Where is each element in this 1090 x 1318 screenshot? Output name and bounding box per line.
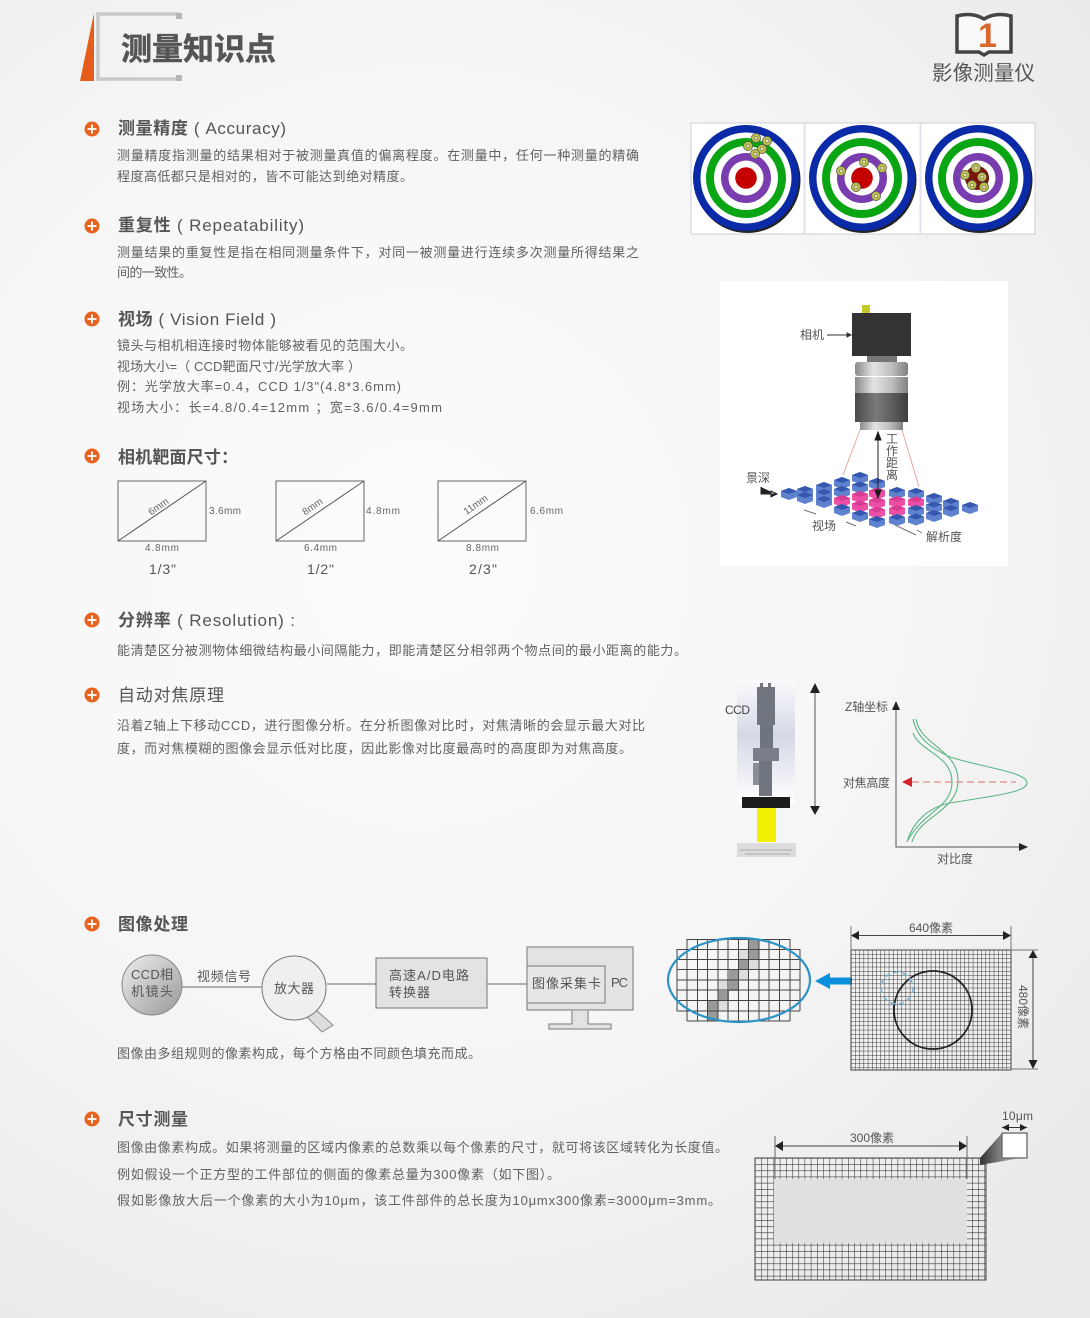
PC monitor bbox=[527, 947, 633, 1029]
target: low precision, high accuracy bbox=[809, 125, 916, 233]
CCD autofocus diagram bbox=[725, 680, 820, 857]
sensor size 2/3: 11mm bbox=[462, 493, 490, 518]
section: 尺寸测量 bbox=[84, 1110, 728, 1208]
labels: 距 bbox=[886, 456, 898, 470]
sensor size 1/3: 1/3" bbox=[149, 561, 176, 577]
field of view lines bbox=[843, 430, 919, 487]
640x480 pixel grid: 640像素 bbox=[909, 921, 953, 935]
section caption: 图像处理: 图像由多组规则的像素构成，每个方格由不同颜色填充而成。 bbox=[117, 1046, 481, 1061]
title: 测量知识点: 测量知识点 bbox=[121, 32, 276, 67]
section: 重复性: 测量结果的重复性是指在相同测量条件下，对同一被测量进行连续多次测量所得结果之 bbox=[117, 245, 639, 260]
working distance arrow bbox=[875, 432, 881, 498]
sensor size 1/2: 8mm bbox=[301, 496, 325, 518]
section: 自动对焦原理: 自动对焦原理 bbox=[118, 686, 224, 705]
CCD autofocus diagram: CCD bbox=[725, 703, 750, 717]
CCD lens: 机镜头 bbox=[131, 984, 173, 999]
section: 重复性: 重复性 ( Repeatability) bbox=[118, 215, 304, 235]
labels: 视场 bbox=[812, 518, 836, 533]
pixel blocks bbox=[781, 472, 978, 528]
section: 测量精度: 测量精度 ( Accuracy) bbox=[118, 119, 286, 138]
vision system diagram bbox=[720, 281, 1008, 566]
section heading: 图像处理 bbox=[84, 915, 188, 934]
640x480 pixel grid: 480像素 bbox=[1016, 985, 1030, 1029]
PC monitor: PC bbox=[611, 975, 628, 990]
accuracy targets image bbox=[691, 123, 1035, 234]
section: 测量精度: 程度高低都只是相对的，皆不可能达到绝对精度。 bbox=[117, 169, 413, 184]
section: 尺寸测量: 图像由像素构成。如果将测量的区域内像素的总数乘以每个像素的尺寸，就可将该区域转化为长度值。 bbox=[117, 1140, 728, 1155]
CCD lens: CCD相 bbox=[131, 967, 173, 982]
logo: book icon with 影像测量仪: 影像测量仪 bbox=[932, 62, 1035, 85]
labels: 相机 bbox=[800, 328, 824, 342]
labels: 作 bbox=[886, 444, 898, 458]
section: 重复性: 间的一致性。 bbox=[117, 265, 192, 280]
sensor size 1/2: 6.4mm bbox=[304, 543, 337, 554]
sensor size 1/2 bbox=[276, 481, 400, 577]
300 pixel workpiece grid: 300像素 bbox=[850, 1131, 894, 1145]
title: 测量知识点 bbox=[80, 13, 276, 81]
contrast vs Z axis chart: 对焦高度 bbox=[843, 775, 890, 790]
sensor size 1/3: 4.8mm bbox=[145, 543, 179, 554]
10μm pixel callout bbox=[980, 1109, 1033, 1165]
logo: book icon with 影像测量仪: 1 bbox=[978, 17, 997, 55]
contrast vs Z axis chart bbox=[843, 699, 1028, 866]
section: 视场: 视场 ( Vision Field ) bbox=[118, 310, 276, 329]
section: 尺寸测量: 假如影像放大后一个像素的大小为10μm，该工件部件的总长度为10μmx300像素=3000μm=3mm。 bbox=[117, 1193, 721, 1208]
section: 测量精度 bbox=[84, 119, 639, 184]
section: 测量精度: 测量精度指测量的结果相对于被测量真值的偏离程度。在测量中，任何一种测量的精确 bbox=[117, 148, 639, 163]
labels: 解析度 bbox=[926, 529, 962, 544]
sensor size 2/3: 2/3" bbox=[469, 561, 497, 577]
image processing flow diagram: 视频信号 bbox=[197, 969, 251, 984]
A/D converter bbox=[376, 958, 487, 1008]
section: 视场: 视场大小：长=4.8/0.4=12mm ；宽=3.6/0.4=9mm bbox=[117, 400, 442, 416]
10μm pixel callout: 10μm bbox=[1002, 1109, 1033, 1123]
section: 自动对焦原理 bbox=[84, 686, 645, 756]
section heading: 相机靶面尺寸: 相机靶面尺寸： bbox=[118, 448, 238, 467]
sensor size 1/3 bbox=[118, 481, 241, 577]
amplifier bbox=[262, 956, 333, 1032]
section: 视场: 例：光学放大率=0.4，CCD 1/3"(4.8*3.6mm) bbox=[117, 379, 401, 394]
sensor size 2/3: 6.6mm bbox=[530, 506, 563, 517]
labels: 离 bbox=[886, 467, 898, 482]
section: 视场: 视场大小=（ CCD靶面尺寸/光学放大率 ） bbox=[117, 359, 361, 374]
labels bbox=[746, 328, 962, 544]
contrast vs Z axis chart: Z轴坐标 bbox=[845, 699, 888, 714]
CCD lens bbox=[122, 955, 182, 1015]
section: 视场: 镜头与相机相连接时物体能够被看见的范围大小。 bbox=[117, 338, 413, 353]
target: high precision, high accuracy bbox=[925, 125, 1032, 233]
sensor size 1/2: 1/2" bbox=[307, 561, 334, 577]
labels: 工 bbox=[886, 432, 898, 446]
section: 自动对焦原理: 沿着Z轴上下移动CCD，进行图像分析。在分析图像对比时，对焦清晰的会显示最大对比 bbox=[117, 718, 645, 733]
target: high precision, low accuracy bbox=[693, 125, 800, 233]
section heading: 图像处理: 图像处理 bbox=[118, 915, 188, 934]
contrast vs Z axis chart: 对比度 bbox=[937, 851, 973, 866]
sensor size 1/3: 6mm bbox=[147, 496, 171, 518]
section: 重复性 bbox=[84, 215, 639, 280]
640x480 pixel grid bbox=[851, 921, 1038, 1070]
image processing flow diagram bbox=[122, 947, 633, 1032]
labels: 景深 bbox=[746, 471, 770, 485]
blue arrow bbox=[815, 973, 852, 989]
section: 尺寸测量: 例如假设一个正方型的工件部位的侧面的像素总量为300像素（如下图）。 bbox=[117, 1167, 560, 1182]
sensor size 2/3: 8.8mm bbox=[466, 543, 499, 554]
pixel zoom ellipse bbox=[668, 938, 810, 1022]
logo: book icon with 影像测量仪 bbox=[932, 15, 1035, 85]
amplifier: 放大器 bbox=[274, 981, 314, 996]
PC monitor: 图像采集卡 bbox=[532, 976, 601, 991]
300 pixel workpiece grid bbox=[755, 1109, 1033, 1280]
sensor size 1/2: 4.8mm bbox=[366, 506, 400, 517]
section: 分辨率: 分辨率 ( Resolution) : bbox=[118, 610, 295, 630]
section: 视场 bbox=[84, 310, 442, 416]
camera and lens bbox=[852, 305, 911, 430]
sensor size 2/3 bbox=[438, 481, 563, 577]
A/D converter: 高速A/D电路 bbox=[389, 968, 469, 983]
section: 分辨率: 能清楚区分被测物体细微结构最小间隔能力，即能清楚区分相邻两个物点间的最小距离的能力。 bbox=[117, 643, 687, 658]
section: 分辨率 bbox=[84, 610, 687, 658]
section: 自动对焦原理: 度，而对焦模糊的图像会显示低对比度，因此影像对比度最高时的高度即为对焦高度。 bbox=[117, 741, 632, 756]
A/D converter: 转换器 bbox=[389, 985, 430, 1000]
sensor size 1/3: 3.6mm bbox=[209, 506, 241, 517]
section: 尺寸测量: 尺寸测量 bbox=[118, 1110, 188, 1129]
